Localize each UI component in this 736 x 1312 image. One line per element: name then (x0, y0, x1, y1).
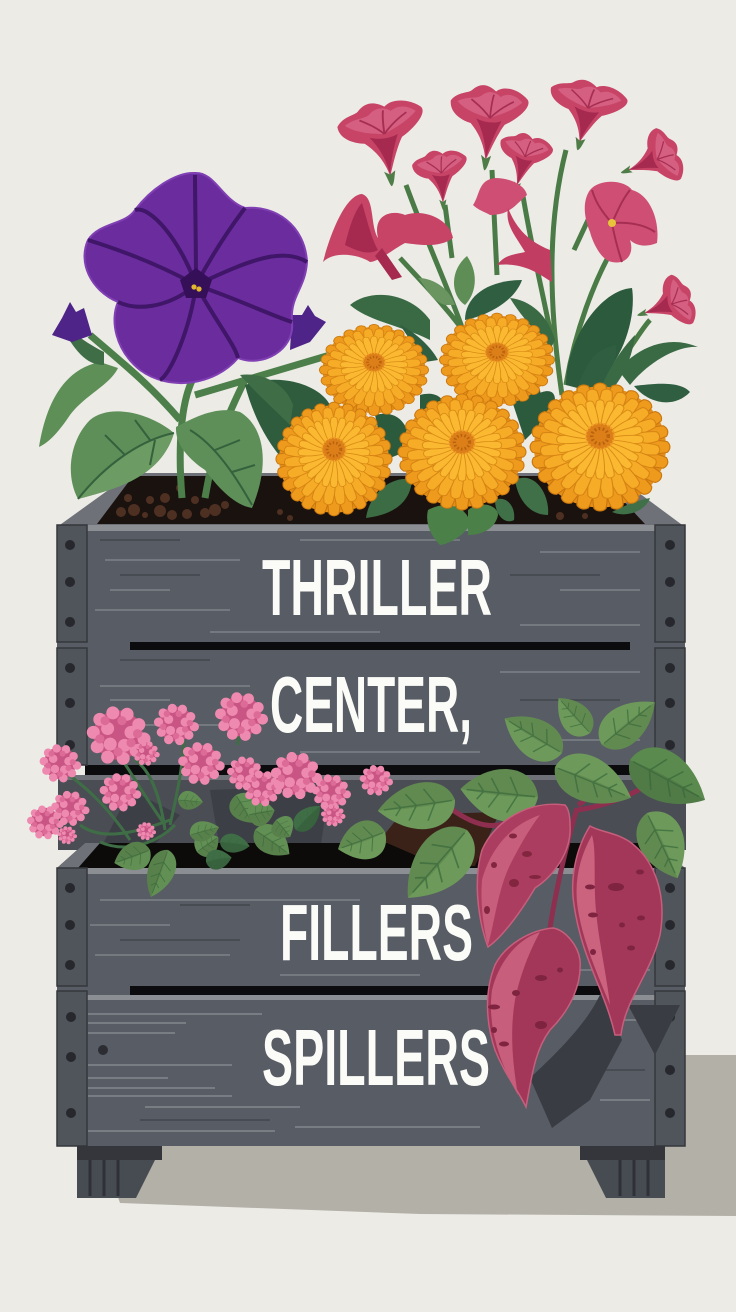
shadow of sweet potatoes on crate (530, 990, 680, 1128)
side buds (52, 302, 92, 342)
drooping bloom (473, 178, 552, 282)
tuber right (573, 826, 662, 1035)
label: thriller: THRILLER (262, 543, 492, 632)
board: fillers (57, 843, 685, 986)
vines (450, 772, 642, 928)
corner posts with bolts (57, 525, 685, 1146)
ground shadow (100, 1055, 736, 1216)
tuber bottom (488, 928, 580, 1107)
petunia throat (180, 268, 212, 298)
wide side bloom (323, 194, 453, 280)
leaves (39, 325, 330, 508)
plant: purple petunia thriller (39, 173, 330, 508)
plant: sweet potato spillers (332, 686, 718, 1107)
trumpet blooms (335, 96, 432, 193)
blooms (319, 324, 429, 416)
label: spillers: SPILLERS (262, 1013, 490, 1102)
pink clusters (40, 744, 81, 783)
plant: marigolds center (276, 313, 670, 545)
label: center: CENTER, (270, 660, 472, 749)
plant: crimson thriller flowers (323, 73, 700, 440)
leaves (110, 788, 327, 902)
board: center (57, 642, 685, 765)
bloom (85, 173, 307, 383)
tuber left (477, 804, 570, 947)
soil patch (380, 812, 500, 866)
soil (97, 476, 645, 524)
label: fillers: FILLERS (280, 888, 473, 977)
stems (65, 725, 241, 847)
board: spillers (57, 986, 685, 1146)
open bloom with yellow throat (585, 182, 658, 263)
foliage (366, 390, 650, 545)
stems (90, 335, 330, 498)
inner back board of lower box (58, 775, 686, 850)
plant: pink fillers (27, 692, 393, 902)
planter crate (57, 473, 686, 1198)
dark foliage (350, 256, 698, 440)
board: thriller (57, 473, 685, 642)
stems (400, 150, 650, 395)
crate back and gaps (85, 640, 655, 995)
crate feet (77, 1146, 665, 1198)
foliage (332, 686, 718, 916)
